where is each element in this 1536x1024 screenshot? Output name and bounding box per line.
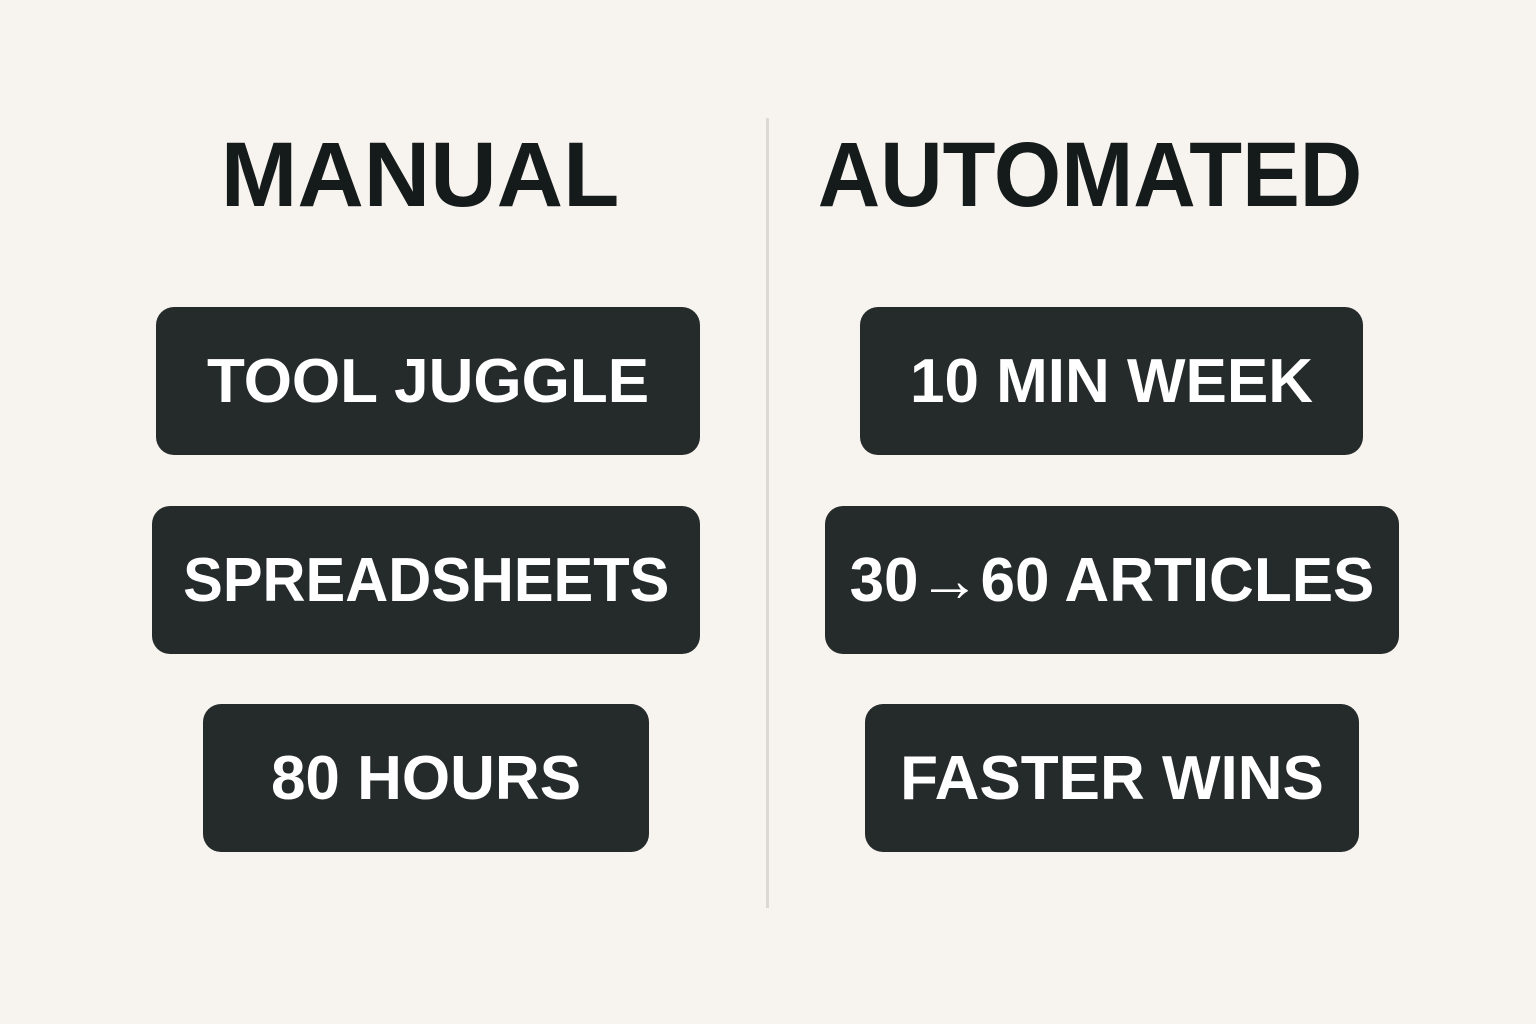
title: automated: AUTOMATED — [818, 124, 1362, 226]
box: 30→60 articles: 30→60 ARTICLES — [850, 546, 1374, 614]
box: faster wins — [865, 704, 1359, 852]
box: tool juggle: TOOL JUGGLE — [207, 346, 649, 416]
box: spreadsheets: SPREADSHEETS — [183, 546, 669, 614]
box: tool juggle — [156, 307, 700, 455]
box: 80 hours: 80 HOURS — [271, 744, 581, 812]
box: 30→60 articles — [825, 506, 1399, 654]
title: manual: MANUAL — [221, 124, 619, 226]
box: faster wins: FASTER WINS — [900, 744, 1324, 812]
box: spreadsheets — [152, 506, 700, 654]
divider — [766, 118, 769, 908]
box: 10 min week — [860, 307, 1363, 455]
box: 80 hours — [203, 704, 649, 852]
box: 10 min week: 10 MIN WEEK — [910, 346, 1313, 416]
